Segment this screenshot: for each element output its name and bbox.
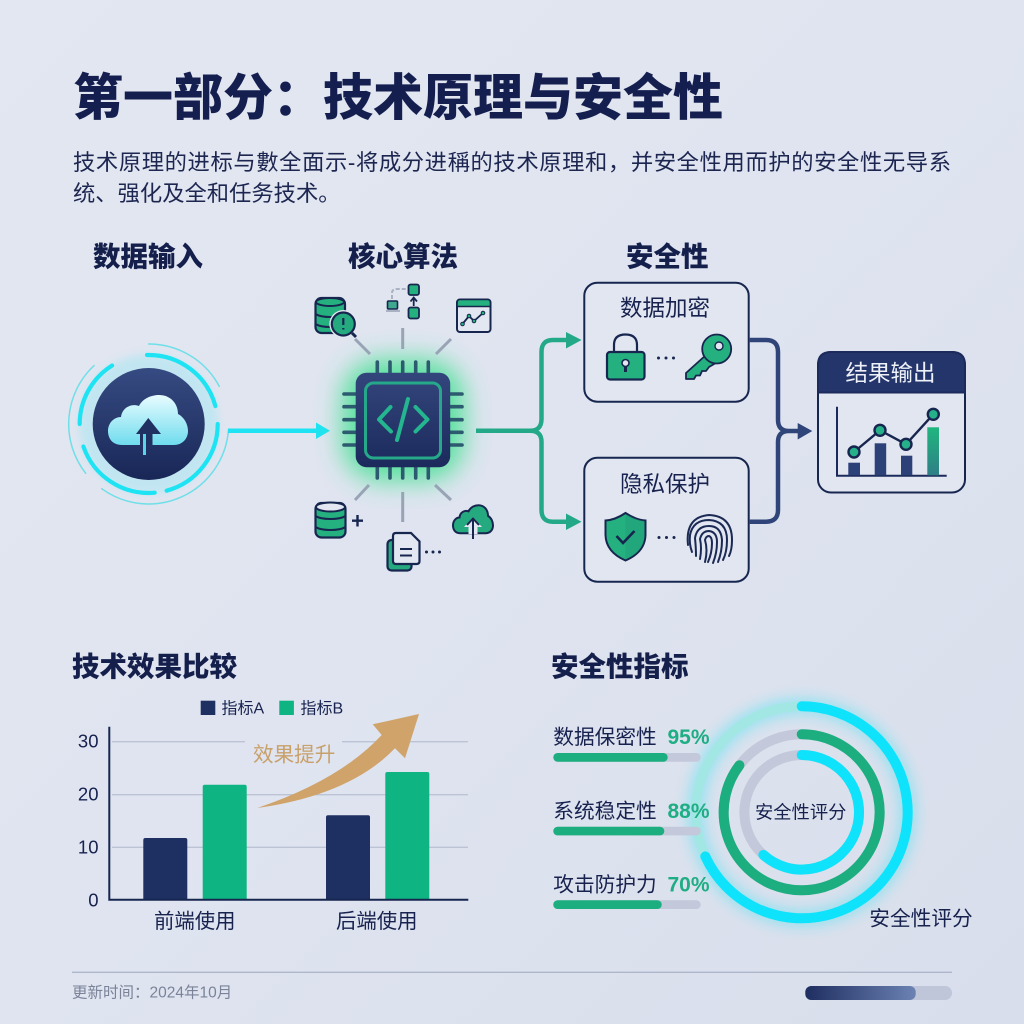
ring caption: 安全性评分 bbox=[869, 908, 973, 930]
label: data encryption: 数据加密 bbox=[620, 296, 710, 321]
metric: data confidentiality: 95% bbox=[668, 726, 710, 749]
label: result output: 结果输出 bbox=[846, 361, 936, 386]
title: 第一部分：技术原理与安全性 bbox=[73, 58, 723, 130]
y axis labels: 30 bbox=[78, 730, 98, 752]
ring center label: 安全性评分 bbox=[755, 802, 846, 822]
metric: system stability: 88% bbox=[668, 800, 710, 823]
metric: attack defense: 攻击防护力 bbox=[553, 874, 657, 896]
y axis labels bbox=[78, 730, 98, 910]
arrow: input to algorithm bbox=[228, 422, 330, 439]
dots bbox=[657, 356, 675, 360]
legend: 指标B bbox=[300, 700, 343, 718]
intro text: 技术原理的进标与數全面示-将成分进稱的技术原理和，并安全性用而护的安全性无导系 bbox=[73, 150, 951, 175]
category labels: 前端使用 bbox=[154, 910, 236, 933]
metric: system stability: 系统稳定性 bbox=[553, 800, 657, 823]
y axis labels: 20 bbox=[78, 784, 98, 804]
icon: fingerprint bbox=[688, 515, 732, 563]
heading: comparison: 技术效果比较 bbox=[72, 651, 237, 682]
intro text bbox=[73, 150, 951, 206]
bars bbox=[143, 772, 429, 899]
intro text: 统、强化及全和任务技术。 bbox=[73, 181, 341, 206]
dots bbox=[658, 536, 676, 539]
result chart bbox=[837, 407, 947, 476]
connector: security to result bbox=[749, 340, 812, 522]
heading: data input: 数据输入 bbox=[93, 241, 203, 272]
icon: flow diagram bbox=[386, 284, 419, 318]
metric: data confidentiality: 数据保密性 bbox=[553, 726, 657, 749]
metric: data confidentiality bbox=[553, 726, 710, 762]
arrow: improvement bbox=[257, 714, 419, 808]
ring chart bbox=[696, 706, 908, 918]
footer date: 更新时间：2024年10月 bbox=[72, 984, 232, 1002]
y axis labels: 10 bbox=[78, 836, 98, 858]
heading: core algorithm: 核心算法 bbox=[348, 241, 458, 272]
panel: data encryption bbox=[584, 283, 749, 402]
metric: system stability bbox=[553, 800, 710, 835]
panel: privacy protection bbox=[584, 458, 749, 582]
label: privacy protection: 隐私保护 bbox=[620, 472, 710, 497]
icon: padlock bbox=[607, 334, 644, 380]
heading: security metrics: 安全性指标 bbox=[551, 651, 689, 682]
icon: cloud upload with rings bbox=[69, 344, 229, 504]
footer progress bar bbox=[805, 986, 952, 1000]
icon: database plus bbox=[316, 502, 363, 538]
bar chart: 后端使用 bbox=[336, 910, 418, 933]
panel: result output bbox=[818, 352, 965, 492]
bar chart bbox=[78, 700, 468, 933]
icon: shield bbox=[606, 513, 646, 560]
heading: security: 安全性 bbox=[626, 241, 708, 272]
spokes around chip bbox=[355, 328, 451, 522]
legend: 指标A bbox=[222, 700, 265, 718]
icon: browser chart bbox=[457, 300, 490, 332]
icon: key bbox=[686, 334, 731, 379]
icon: database search bbox=[316, 298, 357, 338]
icon: small cloud upload bbox=[453, 505, 493, 539]
icon: documents bbox=[388, 533, 441, 570]
label: improvement: 效果提升 bbox=[253, 744, 335, 766]
icon: processor chip bbox=[342, 359, 464, 481]
legend bbox=[201, 700, 343, 718]
connector: algorithm to security bbox=[476, 332, 582, 530]
y axis labels: 0 bbox=[88, 890, 98, 910]
metric: attack defense bbox=[553, 874, 710, 909]
metric: attack defense: 70% bbox=[668, 874, 710, 896]
